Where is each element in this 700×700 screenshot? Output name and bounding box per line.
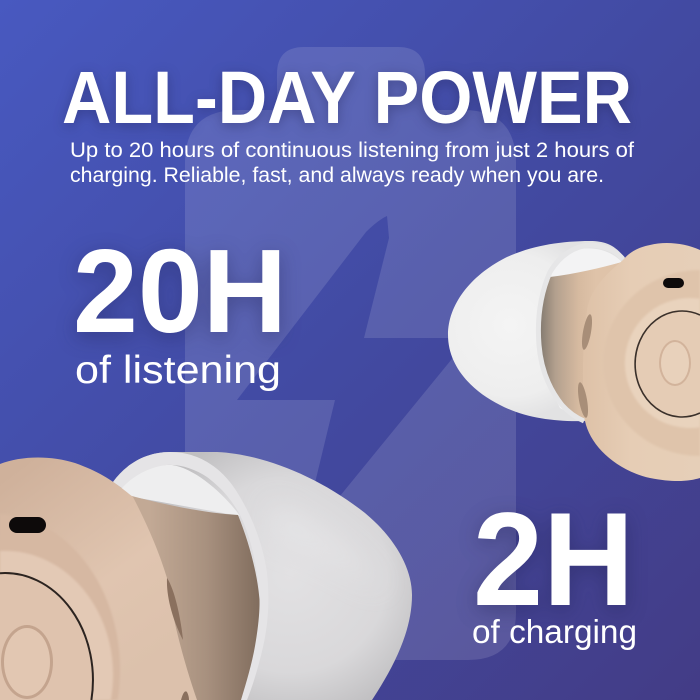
subtitle bbox=[70, 139, 634, 187]
stem: upper right bbox=[539, 262, 622, 421]
stat: 20H of listening: 20H bbox=[73, 225, 287, 358]
icon: battery with lightning bolt bbox=[185, 47, 516, 660]
rim: upper right bbox=[538, 245, 623, 421]
stat: 2H of charging: 2H bbox=[473, 486, 634, 634]
charging slot: lower left bbox=[9, 517, 46, 533]
ear tip: upper right bbox=[448, 241, 625, 421]
subtitle: Up to 20 hours of continuous listening from just 2 hours of bbox=[70, 139, 634, 162]
stat: 2H of charging: of charging bbox=[472, 613, 637, 650]
flange: lower left bbox=[0, 457, 197, 700]
stem: lower left bbox=[128, 495, 260, 700]
inner lining: lower left bbox=[120, 465, 240, 516]
vent holes: upper right bbox=[580, 314, 594, 350]
control ring: upper right bbox=[635, 311, 700, 417]
earbud: upper right bbox=[448, 241, 700, 481]
flange: upper right bbox=[583, 243, 700, 481]
earbud: lower left bbox=[0, 452, 412, 700]
subtitle: charging. Reliable, fast, and always ready when you are. bbox=[70, 164, 604, 187]
control ring: lower left bbox=[0, 573, 93, 700]
ear tip: lower left bbox=[113, 452, 412, 700]
rim: lower left bbox=[113, 452, 268, 700]
charging slot: upper right bbox=[663, 278, 684, 288]
vent holes: lower left bbox=[167, 578, 183, 640]
centre button: lower left bbox=[1, 625, 53, 699]
title: ALL-DAY POWER bbox=[62, 56, 632, 139]
centre button: upper right bbox=[659, 340, 691, 386]
stat: 20H of listening: of listening bbox=[75, 349, 281, 392]
inner lining: upper right bbox=[548, 248, 622, 420]
